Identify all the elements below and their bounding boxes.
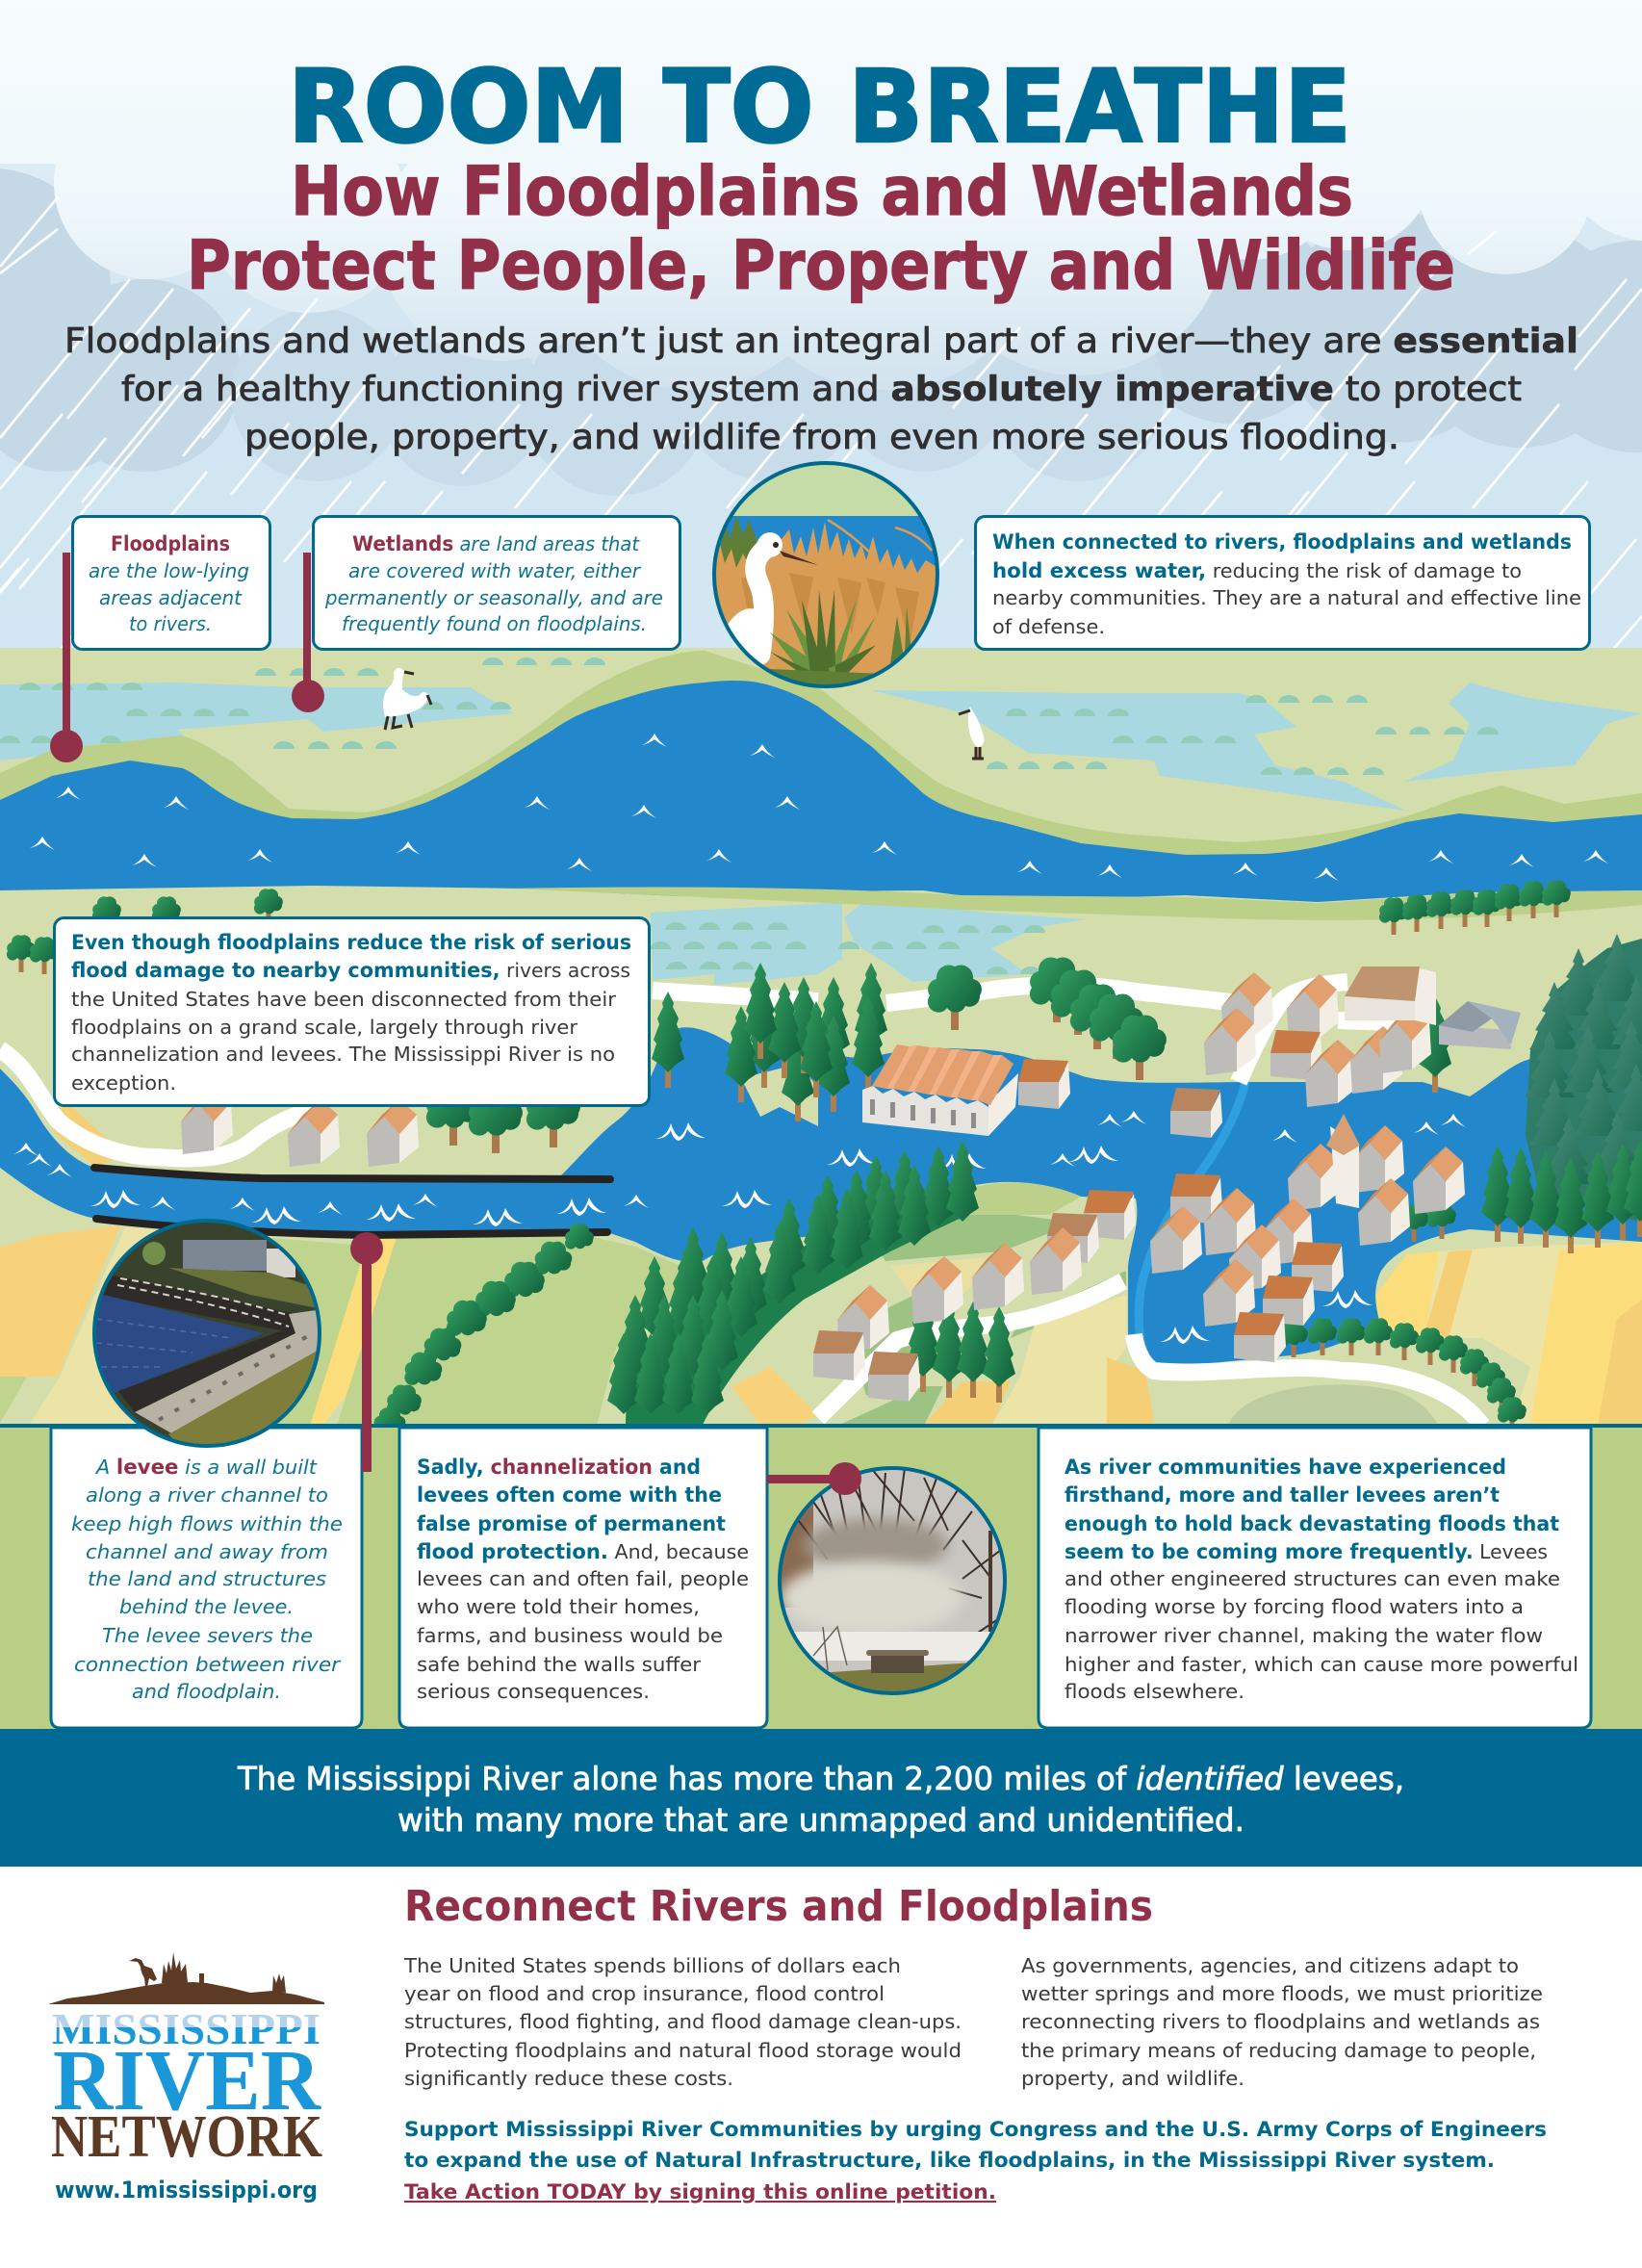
callout: wetlands: permanently or seasonally, and are: [324, 586, 663, 609]
callout: connected floodplains: nearby communities. They are a natural and effective line: [992, 586, 1581, 609]
roads: [0, 982, 1482, 1426]
stream in the flood: [1139, 1082, 1245, 1367]
panel: false promise: flood protection. And, because: [417, 1540, 749, 1563]
callout: connected floodplains: When connected to rivers, floodplains and wetlands: [992, 530, 1572, 554]
egret on the right wetland: [959, 707, 984, 759]
text column: costs: Protecting floodplains and natural flood storage would: [404, 2039, 962, 2062]
logo: Mississippi River Network: www.1mississippi.org: [55, 2177, 318, 2204]
panel: more levees: flooding worse by forcing flood waters into a: [1065, 1595, 1524, 1618]
panel: more levees: higher and faster, which can cause more powerful: [1065, 1653, 1578, 1676]
logo: Mississippi River Network: RIVER: [53, 2033, 321, 2128]
callout: wetlands: [314, 516, 680, 649]
waves on flooded river: [13, 1111, 1466, 1344]
text column: costs: significantly reduce these costs.: [404, 2067, 733, 2090]
call to action: to expand the use of Natural Infrastructure, like floodplains, in the Mississippi River system.: [404, 2149, 1495, 2172]
banner: levee statistic: The Mississippi River alone has more than 2,200 miles of identified levees,: [237, 1760, 1404, 1797]
panel: levee definition: A levee is a wall built: [94, 1456, 318, 1479]
panel: levee definition: channel and away from: [86, 1540, 328, 1563]
big barn: [1345, 966, 1436, 1025]
factory building: [862, 1044, 1018, 1136]
text column: costs: [403, 1954, 962, 2090]
subtitle: Protect People, Property and Wildlife: [187, 226, 1455, 305]
callout: disconnection: floodplains on a grand scale, largely through river: [71, 1016, 578, 1039]
callout: disconnection: flood damage to nearby communities, rivers across: [71, 959, 630, 982]
panel: false promise: who were told their homes,: [417, 1595, 700, 1618]
panel: more levees: firsthand, more and taller levees aren’t: [1065, 1483, 1500, 1507]
rain streaks: [0, 197, 1642, 697]
logo: Mississippi River Network: MISSISSIPPI: [52, 2004, 321, 2053]
village houses: [181, 972, 1465, 1402]
callout: disconnection: the United States have been disconnected from their: [71, 988, 617, 1011]
egret on the left wetland: [383, 668, 431, 730]
panel: levee definition: along a river channel to: [86, 1483, 328, 1507]
lower bank: [510, 888, 1642, 920]
panel: levee definition: connection between river: [74, 1653, 342, 1676]
intro statement: people, property, and wildlife from even more serious flooding.: [244, 418, 1399, 457]
tree rows and forests: [7, 880, 1642, 1435]
bank of the river: [0, 651, 1642, 866]
subtitle: How Floodplains and Wetlands: [291, 152, 1353, 231]
text column: priorities: wetter springs and more floods, we must prioritize: [1021, 1982, 1543, 2005]
lower landscape fields: [0, 1105, 1642, 1426]
wetland pools: [0, 683, 1642, 985]
callout: floodplains: areas adjacent: [99, 586, 243, 609]
callout: wetlands: are covered with water, either: [348, 559, 642, 582]
panel: false promise: Sadly, channelization and: [417, 1456, 701, 1479]
panel: more levees: and other engineered structures can even make: [1065, 1567, 1560, 1590]
band behind lower text panels: [0, 1426, 1642, 1729]
panel: more levees: As river communities have experienced: [1065, 1456, 1506, 1479]
title: ROOM TO BREATHE: [288, 48, 1351, 166]
subtitle: [187, 152, 1455, 305]
callout: floodplains: to rivers.: [129, 612, 212, 635]
panel: more levees: enough to hold back devastating floods that: [1065, 1512, 1559, 1535]
banner: levee statistic: with many more that are unmapped and unidentified.: [398, 1801, 1244, 1839]
levee walls: [94, 1168, 610, 1235]
banner: levee statistic: [0, 1729, 1642, 1867]
callout: disconnection: [54, 918, 649, 1105]
callout: floodplains: [73, 516, 269, 649]
pin: floodplains: [50, 553, 83, 762]
text column: costs: The United States spends billions of dollars each: [403, 1954, 901, 1977]
wetland vegetation mounds: [0, 657, 1499, 974]
intro statement: Floodplains and wetlands aren’t just an integral part of a river—they are essential: [64, 322, 1578, 361]
text column: costs: structures, flood fighting, and flood damage clean-ups.: [404, 2010, 962, 2033]
panel: false promise: false promise of permanent: [417, 1512, 726, 1535]
hill and land patch inside the flood: [960, 1183, 1081, 1215]
panel: levee definition: [51, 1428, 362, 1728]
text column: priorities: the primary means of reducing damage to people,: [1021, 2039, 1536, 2062]
call to action: Take Action TODAY by signing this online petition.: [404, 2180, 996, 2204]
panel: levee definition: the land and structures: [88, 1567, 326, 1590]
panel: false promise: [399, 1428, 767, 1728]
callout: disconnection: exception.: [71, 1071, 176, 1095]
panel: more levees: floods elsewhere.: [1065, 1680, 1244, 1703]
callout: disconnection: channelization and levees. The Mississippi River is no: [71, 1043, 615, 1066]
call to action: Support Mississippi River Communities by urging Congress and the U.S. Army Corps of Engineers: [404, 2118, 1547, 2141]
panel: more levees: [1039, 1428, 1591, 1728]
callout: wetlands: frequently found on floodplains.: [342, 612, 647, 635]
upper river: [0, 681, 1642, 902]
panel: false promise: levees often come with the: [417, 1483, 722, 1507]
panel: levee definition: The levee severs the: [102, 1624, 313, 1647]
callout: floodplains: are the low-lying: [89, 559, 249, 582]
photo: levee: [91, 1218, 322, 1454]
panel: false promise: safe behind the walls suffer: [417, 1653, 702, 1676]
panel: false promise: levees can and often fail, people: [417, 1567, 749, 1590]
panel: false promise: farms, and business would be: [417, 1624, 723, 1647]
white footer background: [0, 1867, 1642, 2268]
logo: Mississippi River Network: MISSISSIPPI: [52, 2004, 321, 2053]
text column: priorities: property, and wildlife.: [1021, 2067, 1244, 2090]
panel: more levees: narrower river channel, making the water flow: [1065, 1624, 1543, 1647]
logo: Mississippi River Network: [48, 1952, 324, 2204]
text column: costs: year on flood and crop insurance, flood control: [404, 1982, 885, 2005]
illustration: egret in reeds: [712, 462, 943, 686]
callout: connected floodplains: of defense.: [992, 615, 1105, 638]
land: upper floodplain: [0, 648, 1642, 1428]
photo: flood waters: [775, 1463, 1011, 1704]
text column: priorities: [1021, 1954, 1543, 2090]
logo: Mississippi River Network: NETWORK: [51, 2104, 322, 2170]
text column: priorities: As governments, agencies, and citizens adapt to: [1021, 1954, 1519, 1977]
panel: levee definition: keep high flows within the: [71, 1512, 343, 1535]
callout: connected floodplains: hold excess water, reducing the risk of damage to: [992, 559, 1522, 582]
intro statement: [64, 322, 1578, 457]
heading: reconnect: Reconnect Rivers and Floodplains: [404, 1882, 1153, 1931]
text column: priorities: reconnecting rivers to floodplains and wetlands as: [1021, 2010, 1540, 2033]
panel: levee definition: and floodplain.: [132, 1680, 281, 1703]
waves on upper river: [30, 734, 1608, 881]
pin: levee: [350, 1232, 383, 1472]
callout: connected floodplains: [976, 516, 1590, 649]
callout: disconnection: Even though floodplains reduce the risk of serious: [71, 931, 631, 954]
call to action: [404, 2118, 1547, 2204]
sky background with clouds: [0, 0, 1642, 674]
callout: floodplains: Floodplains: [111, 532, 230, 555]
gray building: [1439, 1001, 1521, 1049]
panel: levee definition: behind the levee.: [119, 1595, 294, 1618]
panel: false promise: serious consequences.: [417, 1680, 650, 1703]
pin: wetlands: [292, 553, 324, 712]
panel: more levees: seem to be coming more frequently. Levees: [1065, 1540, 1548, 1563]
intro statement: for a healthy functioning river system and absolutely imperative to protect: [121, 370, 1522, 409]
flooded lower river: [0, 1027, 1642, 1371]
callout: wetlands: Wetlands are land areas that: [352, 532, 640, 555]
pin: flood photo: [767, 1462, 861, 1495]
